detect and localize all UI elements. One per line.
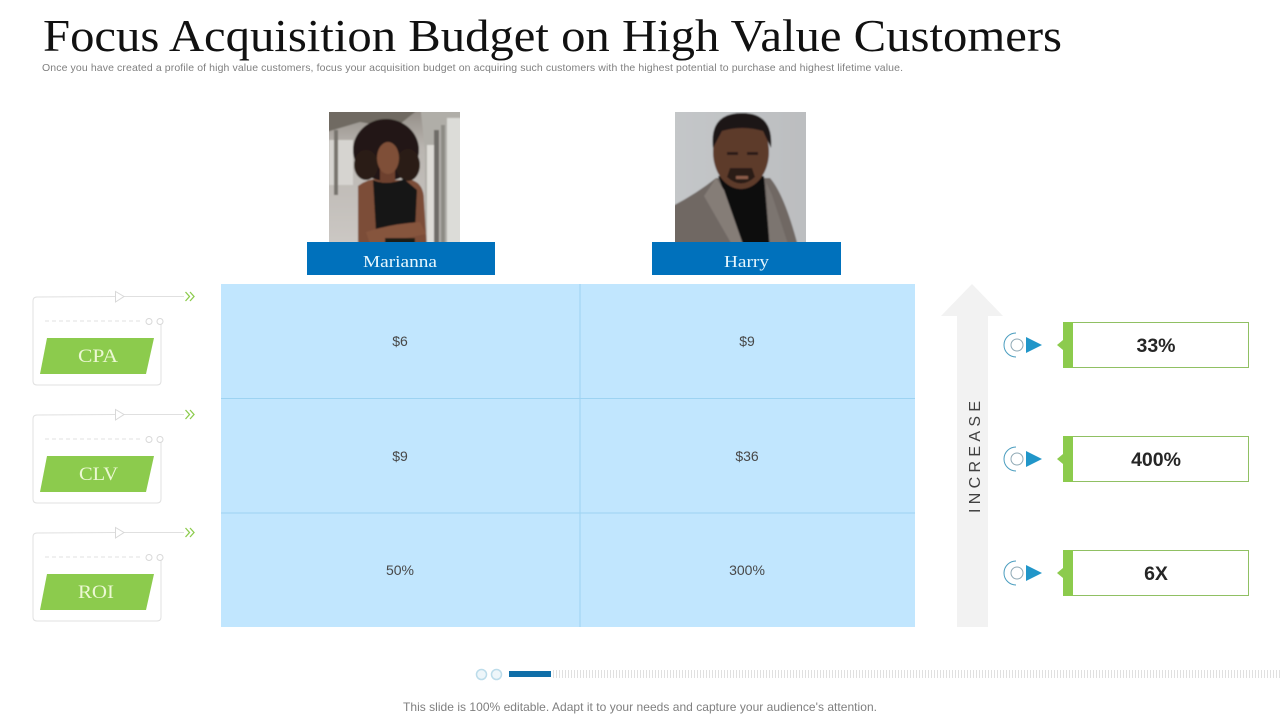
result: 6X — [1004, 550, 1248, 596]
metric card: CLV — [33, 410, 194, 503]
result: 33% — [1004, 322, 1248, 368]
metric card: CPA — [33, 292, 194, 385]
arrow: increase — [941, 284, 1003, 627]
metric card: CPA: CPA — [78, 346, 118, 367]
metric card: ROI: ROI — [78, 582, 114, 603]
row values: CLV: $36 — [735, 448, 759, 464]
portrait: Harry — [675, 112, 806, 242]
row values: ROI: 300% — [729, 562, 765, 578]
arrow: increase: INCREASE — [967, 401, 984, 513]
result: 400%: 400% — [1131, 449, 1181, 471]
portrait: Marianna — [329, 112, 460, 242]
row values: CPA: $6 — [392, 333, 408, 349]
footer note: This slide is 100% editable. Adapt it to your needs and capture your audience's attention. — [403, 700, 877, 714]
name label: Marianna — [307, 242, 495, 275]
title: Focus Acquisition Budget on High Value Customers — [43, 10, 1062, 61]
result: 400% — [1004, 436, 1248, 482]
data table — [221, 284, 915, 627]
name label: Harry: Harry — [724, 252, 770, 271]
row values: CLV: $9 — [392, 448, 408, 464]
row values: CLV — [392, 448, 759, 464]
row values: ROI: 50% — [386, 562, 414, 578]
footer progress decoration — [476, 670, 1280, 680]
name label: Marianna: Marianna — [363, 252, 438, 271]
metric card: ROI — [33, 528, 194, 621]
subtitle: Once you have created a profile of high value customers, focus your acquisition budget on acquiring such customers with the highest potential to purchase and highest lifetime value. — [42, 62, 903, 74]
row values: CPA — [392, 333, 755, 349]
result: 6X: 6X — [1144, 563, 1168, 585]
name label: Harry — [652, 242, 841, 275]
result: 33%: 33% — [1136, 335, 1176, 357]
row values: CPA: $9 — [739, 333, 755, 349]
row values: ROI — [386, 562, 765, 578]
metric card: CLV: CLV — [79, 464, 118, 485]
